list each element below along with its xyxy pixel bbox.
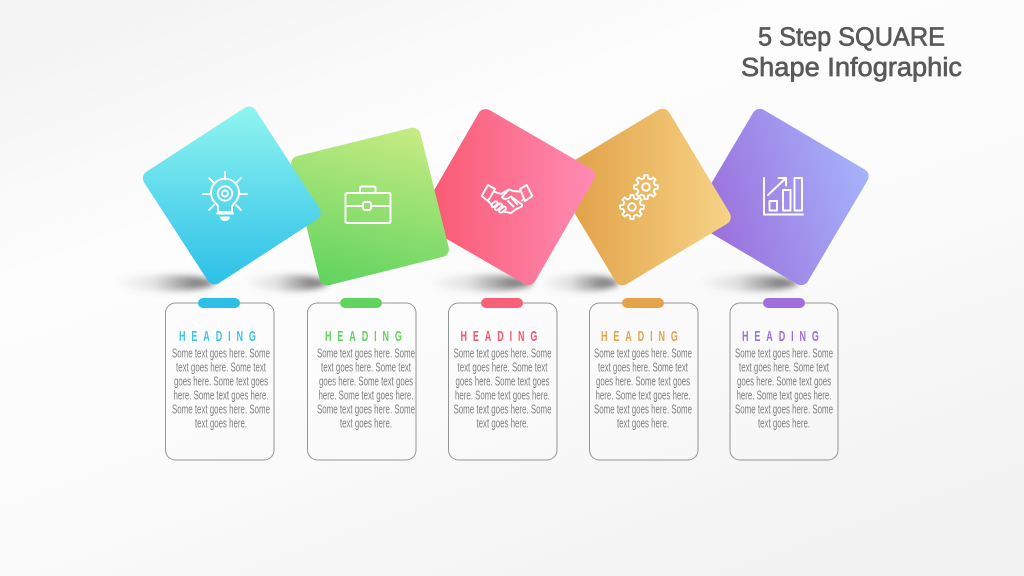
body text [735, 346, 833, 430]
icon: briefcase [346, 186, 390, 223]
heading: HEADING [179, 328, 256, 345]
heading: HEADING [325, 328, 402, 345]
body text: here. Some text goes here. [736, 388, 832, 402]
body text: text goes here. Some text [458, 360, 548, 374]
body text: goes here. Some text goes [174, 374, 268, 388]
body text: text goes here. [340, 416, 392, 430]
card 4 [590, 298, 698, 460]
pill [622, 298, 664, 308]
body text: here. Some text goes here. [596, 388, 690, 402]
icon: bar chart with arrow [764, 178, 803, 214]
heading: HEADING [601, 328, 678, 345]
square 5: purple [689, 106, 872, 288]
title: 5 Step SQUARE [758, 24, 945, 52]
card 1 [166, 298, 274, 460]
body text: here. Some text goes here. [455, 388, 550, 402]
body text [454, 346, 552, 430]
body text: Some text goes here. Some [172, 402, 270, 416]
body text: goes here. Some text goes [737, 374, 831, 388]
ground shadows [115, 275, 798, 291]
heading: HEADING [460, 328, 537, 345]
body text: Some text goes here. Some [317, 346, 415, 360]
icon: handshake [482, 185, 532, 213]
body text: text goes here. [195, 416, 247, 430]
icon: light bulb with gear [203, 172, 247, 220]
body text: text goes here. Some text [321, 360, 411, 374]
body text: Some text goes here. Some [172, 346, 270, 360]
body text: Some text goes here. Some [594, 402, 692, 416]
body text: goes here. Some text goes [319, 374, 413, 388]
pill [481, 298, 523, 308]
pill [763, 298, 805, 308]
body text: Some text goes here. Some [454, 346, 552, 360]
title: Shape Infographic [741, 54, 962, 82]
body text: Some text goes here. Some [317, 402, 415, 416]
body text: goes here. Some text goes [596, 374, 690, 388]
body text: text goes here. Some text [176, 360, 266, 374]
heading: HEADING [742, 328, 819, 345]
body text: Some text goes here. Some [735, 402, 833, 416]
body text: here. Some text goes here. [318, 388, 414, 402]
body text: text goes here. [476, 416, 528, 430]
body text: here. Some text goes here. [174, 388, 268, 402]
body text: Some text goes here. Some [454, 402, 552, 416]
title [741, 24, 962, 82]
body text: Some text goes here. Some [594, 346, 692, 360]
square 4: orange [551, 106, 734, 288]
square 1: blue [140, 104, 324, 287]
upper gear [634, 175, 658, 199]
pill [340, 298, 382, 308]
body text: text goes here. [758, 416, 810, 430]
body text: text goes here. Some text [739, 360, 829, 374]
body text: text goes here. [617, 416, 669, 430]
card 5 [730, 298, 838, 460]
square 2: green [289, 126, 451, 287]
square 3: pink [416, 106, 598, 288]
body text: Some text goes here. Some [735, 346, 833, 360]
body text: goes here. Some text goes [456, 374, 550, 388]
pill [198, 298, 240, 308]
lower gear [620, 195, 644, 219]
body text [317, 346, 415, 430]
icon: gears [620, 175, 658, 219]
body text [594, 346, 692, 430]
body text: text goes here. Some text [598, 360, 688, 374]
card 3 [448, 298, 557, 460]
card 2 [308, 298, 416, 460]
body text [172, 346, 270, 430]
